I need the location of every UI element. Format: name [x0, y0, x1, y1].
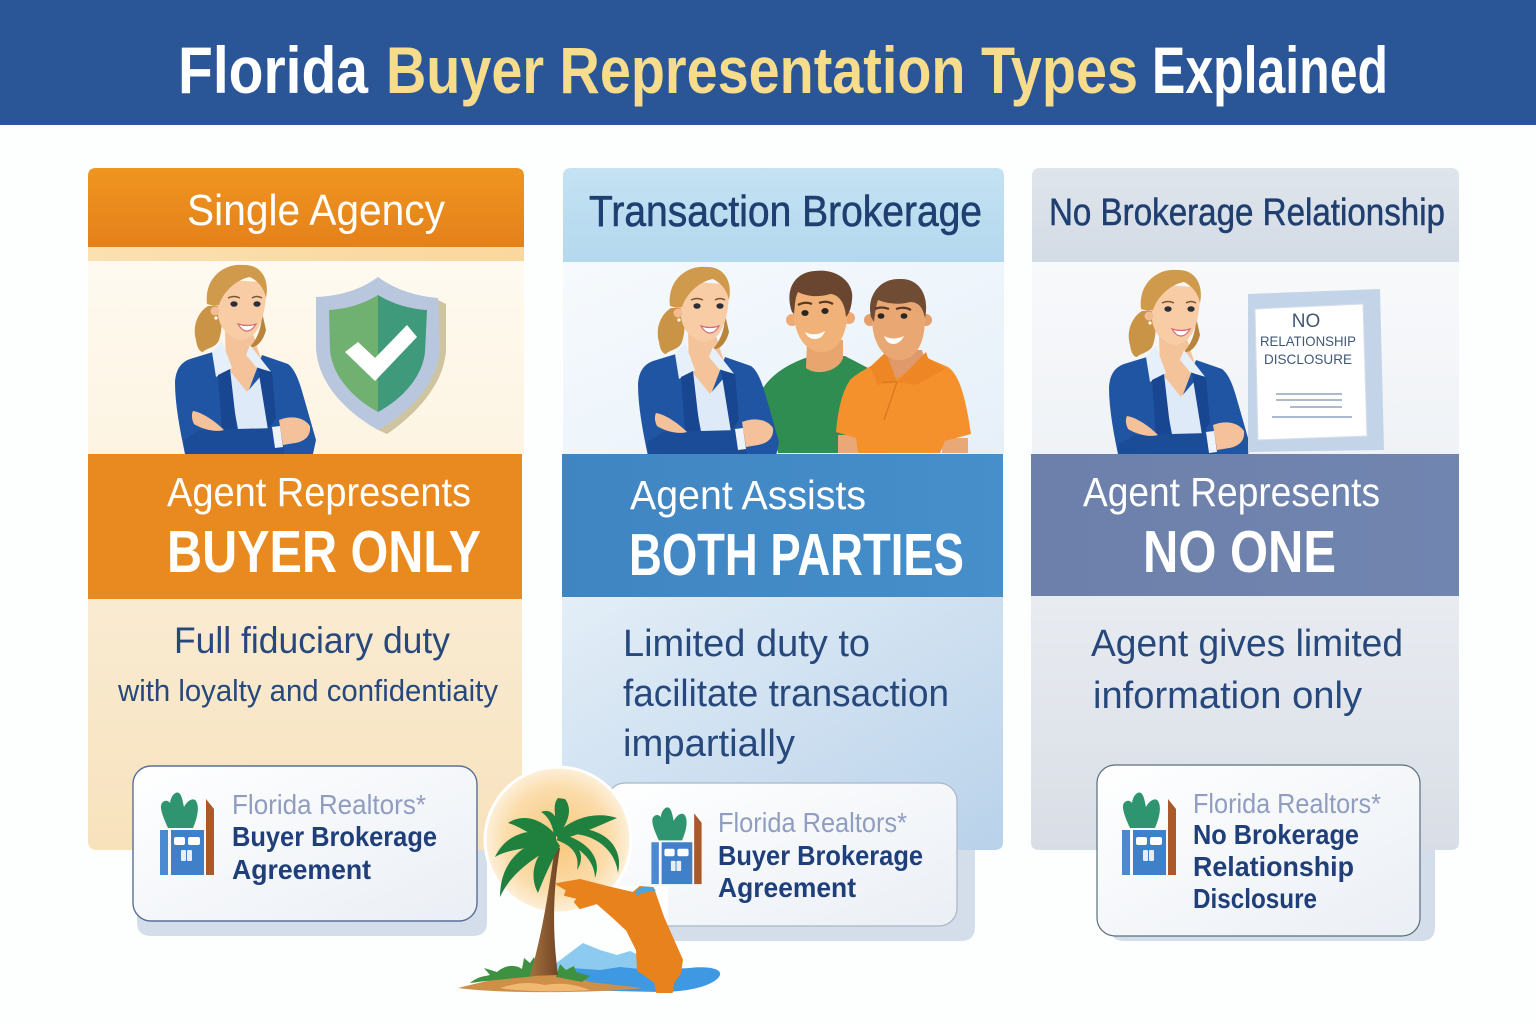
text: duty description: [623, 623, 949, 765]
panel: No Brokerage Relationship: [1031, 168, 1459, 850]
sun: [485, 767, 631, 913]
grass: [470, 957, 590, 983]
text: form name: [718, 807, 923, 903]
text: form name: No Brokerage: [1193, 819, 1359, 850]
title: Explained: [1152, 33, 1388, 107]
band: No One: NO ONE: [1143, 519, 1336, 585]
text: form name: Florida Realtors*: [1193, 788, 1381, 819]
band: Both Parties: Agent Assists: [630, 472, 866, 518]
text: duty description: impartially: [623, 723, 795, 765]
text: duty description: Agent gives limited: [1091, 623, 1403, 665]
illustration: disclosure document: DISCLOSURE: [1264, 351, 1352, 367]
text: duty description: Full fiduciary duty: [174, 620, 450, 661]
badge: Buyer Brokerage Agreement, Single Agency: [133, 766, 487, 936]
icon: shield with check: [316, 277, 446, 434]
text: duty description: [117, 620, 498, 708]
band: No One: Agent Represents: [1083, 469, 1380, 515]
header: Single Agency: [88, 168, 524, 261]
band: Buyer Only: BUYER ONLY: [167, 519, 481, 585]
text: duty description: Limited duty to: [623, 623, 870, 665]
illustration: agent: [1109, 270, 1250, 459]
illustration: first client: [763, 271, 880, 453]
text: duty description: [1091, 623, 1403, 717]
text: duty description: with loyalty and confidentiaity: [117, 673, 498, 708]
header: Single Agency: Single Agency: [187, 186, 445, 235]
band: Both Parties: [562, 454, 1003, 597]
Florida state shape: [557, 880, 682, 992]
badge: Buyer Brokerage Agreement, Transaction Brokerage: [607, 783, 975, 941]
icon: Florida Realtors logo: [651, 807, 702, 884]
title: Buyer Representation Types: [386, 33, 1138, 107]
band: Buyer Only: [88, 454, 522, 599]
illustration: palm tree and Florida map: [458, 767, 720, 992]
text: form name: Agreement: [718, 872, 856, 903]
icon: Florida Realtors logo: [160, 792, 214, 875]
illustration: agent: [175, 265, 316, 454]
band: Both Parties: BOTH PARTIES: [629, 522, 964, 588]
illustration: disclosure document: [1248, 289, 1384, 452]
text: duty description: facilitate transaction: [623, 673, 949, 715]
text: form name: Buyer Brokerage: [232, 821, 437, 852]
text: duty description: information only: [1093, 675, 1362, 717]
water and hills: [555, 943, 720, 992]
title banner: [0, 0, 1536, 125]
illustration: agent: [638, 267, 779, 456]
header: No Brokerage Relationship: [1032, 168, 1459, 262]
text: form name: Florida Realtors*: [718, 807, 907, 838]
badge: No Brokerage Relationship Disclosure: [1097, 765, 1435, 941]
band: No One: [1031, 454, 1459, 596]
text: form name: [232, 789, 437, 885]
illustration: disclosure document: NO: [1292, 311, 1320, 332]
illustration: second client: [836, 279, 971, 453]
trunk: [530, 846, 560, 976]
title: Florida: [178, 33, 369, 107]
text: form name: Agreement: [232, 854, 371, 885]
island: [458, 973, 643, 992]
illustration: disclosure document: RELATIONSHIP: [1260, 333, 1356, 349]
band: Buyer Only: Agent Represents: [167, 469, 471, 515]
icon: Florida Realtors logo: [1122, 792, 1176, 875]
fronds: [495, 798, 619, 897]
header: Transaction Brokerage: [563, 168, 1004, 262]
header: Transaction Brokerage: Transaction Brokerage: [589, 187, 982, 236]
text: form name: Relationship: [1193, 851, 1354, 882]
text: form name: Florida Realtors*: [232, 789, 426, 820]
text: form name: [1193, 788, 1381, 914]
text: form name: Disclosure: [1193, 883, 1317, 914]
panel: Single Agency: [88, 168, 524, 850]
header: No Brokerage Relationship: No Brokerage Relationship: [1049, 192, 1445, 234]
text: form name: Buyer Brokerage: [718, 840, 923, 871]
panel: Transaction Brokerage: [562, 168, 1004, 850]
